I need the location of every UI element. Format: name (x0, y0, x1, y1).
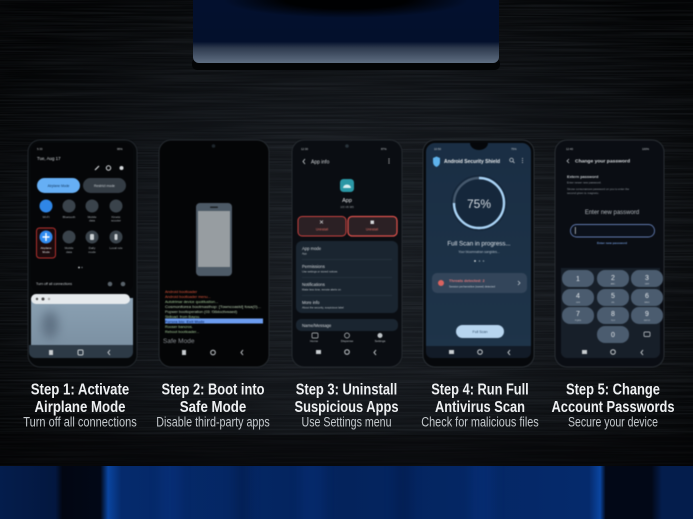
phone 2 nav bar (182, 350, 243, 355)
phone 1 quick settings panel: Tue, Aug 17 (37, 156, 61, 161)
keypad: 4 (576, 293, 580, 300)
phone 4: antivirus scan: Your bloomnatran sangides... (458, 250, 500, 254)
phone 5: change password: 100% (642, 147, 650, 151)
keypad: JKL (611, 302, 616, 304)
airplane mode pill (37, 178, 80, 193)
phone 1 quick settings panel: Turn off all connections (36, 282, 72, 286)
toggle row 1: scooter (111, 218, 121, 222)
toggle row 1: Bluetooth (63, 215, 76, 219)
scan status: Full Scan in progress... (447, 240, 511, 248)
small phone illustration (196, 203, 232, 276)
settings card: App (302, 252, 307, 256)
step 3 caption: Suspicious Apps (294, 399, 399, 416)
phone 4: antivirus scan: 10:50 (434, 147, 441, 151)
step 3 caption: Use Settings menu (302, 414, 392, 430)
header icons (510, 158, 523, 163)
keypad: DEF (645, 284, 650, 286)
step 1 caption: Airplane Mode (34, 399, 126, 416)
full scan button: Full Scan (473, 330, 487, 334)
settings card: About the security, suspicious label (302, 306, 344, 310)
phone 1 quick settings panel (31, 143, 133, 292)
app info header (303, 158, 390, 166)
phone 2 body (159, 140, 269, 367)
toggle row 2: Mobile (65, 246, 74, 250)
phone 1: airplane mode (28, 140, 137, 367)
keypad: 8 (611, 311, 615, 318)
threat card: Threats detected: 2 (449, 278, 486, 283)
step 1 caption: Turn off all connections (23, 414, 137, 430)
step 2 caption: Disable third-party apps (156, 414, 270, 430)
keypad: MNO (644, 302, 650, 304)
phone 5: change password: 12:40 (566, 147, 573, 151)
airplane mode highlighted toggle: Airplane (40, 246, 52, 250)
restrict mode pill: Restrict mode (94, 184, 115, 188)
toggle row 2: Local role (109, 246, 123, 250)
progress ring (451, 175, 507, 231)
airplane mode highlighted toggle: Mode (42, 250, 50, 254)
phone 4 screen (426, 143, 531, 346)
link: Enter new password (597, 241, 627, 245)
keypad: 6 (645, 293, 649, 300)
phone 5 body (555, 140, 664, 367)
keypad (561, 268, 663, 358)
keypad: TUV (611, 320, 616, 322)
boot log (165, 290, 263, 334)
phone 3: app info (292, 140, 402, 367)
phone 3 body (292, 140, 402, 367)
phone 4 body (423, 140, 534, 367)
phone 4 nav bar (449, 350, 510, 355)
phone 1 notification shade (31, 294, 133, 348)
step 4 caption: Antivirus Scan (435, 399, 525, 416)
step 1 caption: Step 1: Activate (31, 382, 129, 398)
step 3 caption: Step 3: Uninstall (296, 382, 397, 398)
toggle row 1: Mobile (88, 215, 97, 219)
app title: Android Security Shield (444, 159, 500, 165)
boot log: Android bootloader menu... (165, 295, 211, 299)
bottom tabs: Settings (375, 339, 386, 343)
boot log: Android bootloader (165, 290, 198, 294)
step 2 caption (156, 382, 270, 430)
toggle row 2 (62, 230, 123, 254)
phone 2: safe mode (159, 140, 269, 367)
step 4 caption (421, 382, 539, 430)
phone 1 quick settings panel: 5:33 (37, 147, 43, 151)
uninstall button left: Uninstall (316, 228, 328, 232)
keypad: GHI (576, 302, 580, 304)
keypad: 2 (611, 275, 615, 282)
toggle row 1: Wi-Fi (42, 215, 50, 219)
bottom tabs: Dispense (341, 339, 354, 343)
bottom tabs (310, 333, 386, 343)
header: Change your password (575, 158, 630, 164)
boot log: Sidload: from Bayou. (165, 315, 200, 319)
boot log: Autotrimar device quotitustion... (165, 300, 218, 304)
step 2 caption: Step 2: Boot into (162, 382, 265, 398)
toggle row 1 (40, 200, 122, 222)
instructions: Extern password (567, 174, 599, 179)
phone 3: app info: 12:30 (301, 147, 308, 151)
instructions: Enter newer new password. (567, 180, 602, 184)
app name: App (342, 198, 352, 204)
app icon (340, 179, 354, 192)
phone 1 nav bar (29, 345, 133, 358)
phone 3: app info: 105 VB 985 (340, 205, 354, 209)
boot log: Cosmonitorea bootmasthop: [Towncoastd] fosa(0)... (165, 305, 261, 309)
instructions (567, 174, 630, 195)
settings card: Notifications (302, 282, 325, 287)
pager dots (474, 260, 484, 262)
uninstall button left (298, 216, 346, 236)
toggle row 1: data (89, 218, 95, 222)
toggle row 1: Kinetic (111, 215, 121, 219)
enter new password label: Enter new password (585, 210, 639, 216)
step 1 caption (23, 382, 137, 430)
step 2 caption: Safe Mode (180, 399, 246, 416)
bottom blue glowing strip (0, 466, 693, 519)
laptop at top edge (192, 0, 500, 70)
step 5 caption: Step 5: Change (566, 382, 660, 398)
keypad: 1 (576, 276, 580, 283)
toggle row 2: Daily (89, 246, 96, 250)
safe mode label: Safe Mode (163, 338, 195, 345)
step 3 caption (294, 382, 399, 430)
keypad: WXYZ (644, 320, 651, 322)
threat card: Session per/sensitive (sweet) detected (449, 284, 496, 288)
phone 1 body (28, 140, 137, 367)
uninstall button right (348, 216, 397, 236)
keypad: 9 (645, 311, 649, 318)
settings card: Make less time, remote alerts on (302, 288, 341, 292)
second card: Name/Message (302, 323, 332, 328)
phone 3 nav bar (316, 350, 376, 355)
settings card: App mode (302, 246, 322, 251)
instructions: second given to magneto. (567, 191, 599, 195)
uninstall button right: Uninstall (366, 228, 378, 232)
settings card (296, 241, 398, 313)
keypad: PQRS (575, 320, 582, 322)
phone 5 nav bar (582, 350, 643, 355)
phone 4: antivirus scan (423, 140, 534, 367)
full scan button (456, 325, 504, 338)
keypad: 5 (611, 293, 615, 300)
restrict mode pill (83, 178, 126, 193)
step 4 caption: Step 4: Run Full (431, 382, 529, 398)
step 5 caption (552, 382, 675, 430)
phone 5: change password (555, 140, 664, 367)
boot log: Reboot bootloader... (165, 330, 199, 334)
step 4 caption: Check for malicious files (421, 414, 539, 430)
keypad: ABC (611, 282, 616, 286)
boot log: Popwer bootloperation (03: f36doctivwaed) (165, 310, 238, 314)
step 5 caption: Secure your device (568, 414, 658, 430)
instructions: Strose consonances password on you to enter the (567, 187, 630, 191)
app info header: App info (311, 160, 330, 166)
phone 4: antivirus scan: 75% (511, 147, 517, 151)
threat card (432, 273, 527, 293)
password input (570, 224, 654, 237)
airplane mode highlighted toggle (36, 228, 56, 258)
keypad: 3 (645, 275, 649, 282)
toggle row 2: mode (88, 250, 96, 254)
keypad: 7 (576, 311, 580, 318)
shield icon (433, 156, 440, 167)
settings card: More info (302, 300, 320, 305)
toggle row 2: data (66, 250, 72, 254)
boot log: Rooser bancros. (165, 325, 193, 329)
settings card: Permissions (302, 264, 325, 269)
percent: 75% (467, 197, 491, 211)
bottom tabs: Home (310, 339, 318, 343)
phone 1 quick settings panel: 95% (117, 147, 123, 151)
phone 3: app info: 87% (381, 147, 387, 151)
keypad: 0 (611, 332, 615, 339)
airplane mode pill: Airplane Mode (48, 184, 70, 188)
second card (296, 319, 398, 331)
boot log: Forsea bio: Exit Mode (165, 320, 204, 324)
settings card: Use settings or stored notices (302, 270, 338, 274)
